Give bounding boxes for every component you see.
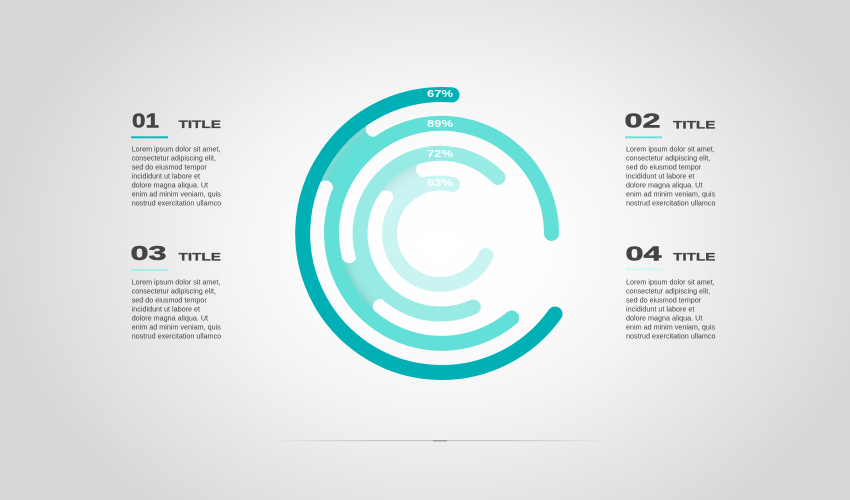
body text 04: sed do eiusmod tempor (626, 296, 702, 304)
body text 04: enim ad minim veniam, quis (626, 322, 715, 332)
ring: 63% (390, 183, 486, 284)
circular chart (303, 95, 555, 373)
body text 02: nostrud exercitation ullamco (626, 199, 716, 208)
body text 04: Lorem ipsum dolor sit amet, (626, 278, 715, 286)
body text 01: enim ad minim veniam, quis (132, 190, 221, 199)
body text 03: enim ad minim veniam, quis (132, 322, 221, 332)
accent line 04 (626, 268, 663, 270)
panel: 01 (131, 110, 223, 208)
body text 03: incididunt ut labore et (132, 304, 200, 314)
label: 67%: 67% (427, 89, 453, 100)
body text 01: sed do eiusmod tempor (132, 163, 207, 172)
accent line 01 (131, 136, 168, 138)
accent line 03 (131, 269, 168, 271)
number 04: 04 (626, 244, 663, 266)
body text 02: dolore magna aliqua. Ut (626, 181, 702, 190)
title 02: TITLE (673, 119, 716, 131)
body text 03: consectetur adipiscing elit, (132, 286, 216, 296)
body text 01: nostrud exercitation ullamco (132, 199, 221, 208)
ring: 67% (303, 95, 555, 373)
body text 01: incididunt ut labore et (132, 172, 200, 181)
body text 01: consectetur adipiscing elit, (132, 154, 216, 163)
body text 03: sed do eiusmod tempor (132, 296, 207, 304)
label: 89%: 89% (427, 119, 453, 130)
body text 03: dolore magna aliqua. Ut (132, 314, 208, 322)
connecting wedges between rings (323, 126, 428, 309)
body text 01: Lorem ipsum dolor sit amet, (132, 145, 220, 154)
body text 02: incididunt ut labore et (626, 172, 694, 181)
panel: 04 (626, 244, 717, 340)
title 04: TITLE (673, 252, 716, 264)
body text 02: sed do eiusmod tempor (626, 163, 702, 172)
ring: 72% (360, 153, 498, 314)
body text 04: consectetur adipiscing elit, (626, 286, 710, 296)
body text 04: dolore magna aliqua. Ut (626, 314, 702, 322)
ground shadow (265, 440, 615, 441)
label: 63%: 63% (427, 178, 453, 189)
body text 03: nostrud exercitation ullamco (132, 332, 221, 340)
number 02: 02 (624, 111, 660, 133)
number 01: 01 (132, 110, 159, 132)
rounded slots cut into the wedges (321, 122, 432, 313)
body text 02: enim ad minim veniam, quis (626, 190, 715, 199)
body text 02: consectetur adipiscing elit, (626, 154, 710, 163)
body text 04: incididunt ut labore et (626, 304, 694, 314)
panel: 03 (130, 243, 223, 340)
body text 03: Lorem ipsum dolor sit amet, (132, 278, 220, 286)
title 01: TITLE (178, 119, 221, 131)
label: 72%: 72% (427, 149, 453, 160)
panel: 02 (624, 111, 717, 208)
ring: 89% (332, 123, 552, 343)
number 03: 03 (130, 243, 166, 265)
body text 02: Lorem ipsum dolor sit amet, (626, 145, 715, 154)
body text 01: dolore magna aliqua. Ut (132, 181, 208, 190)
body text 04: nostrud exercitation ullamco (626, 332, 716, 340)
title 03: TITLE (178, 251, 221, 263)
accent line 02 (625, 136, 662, 138)
